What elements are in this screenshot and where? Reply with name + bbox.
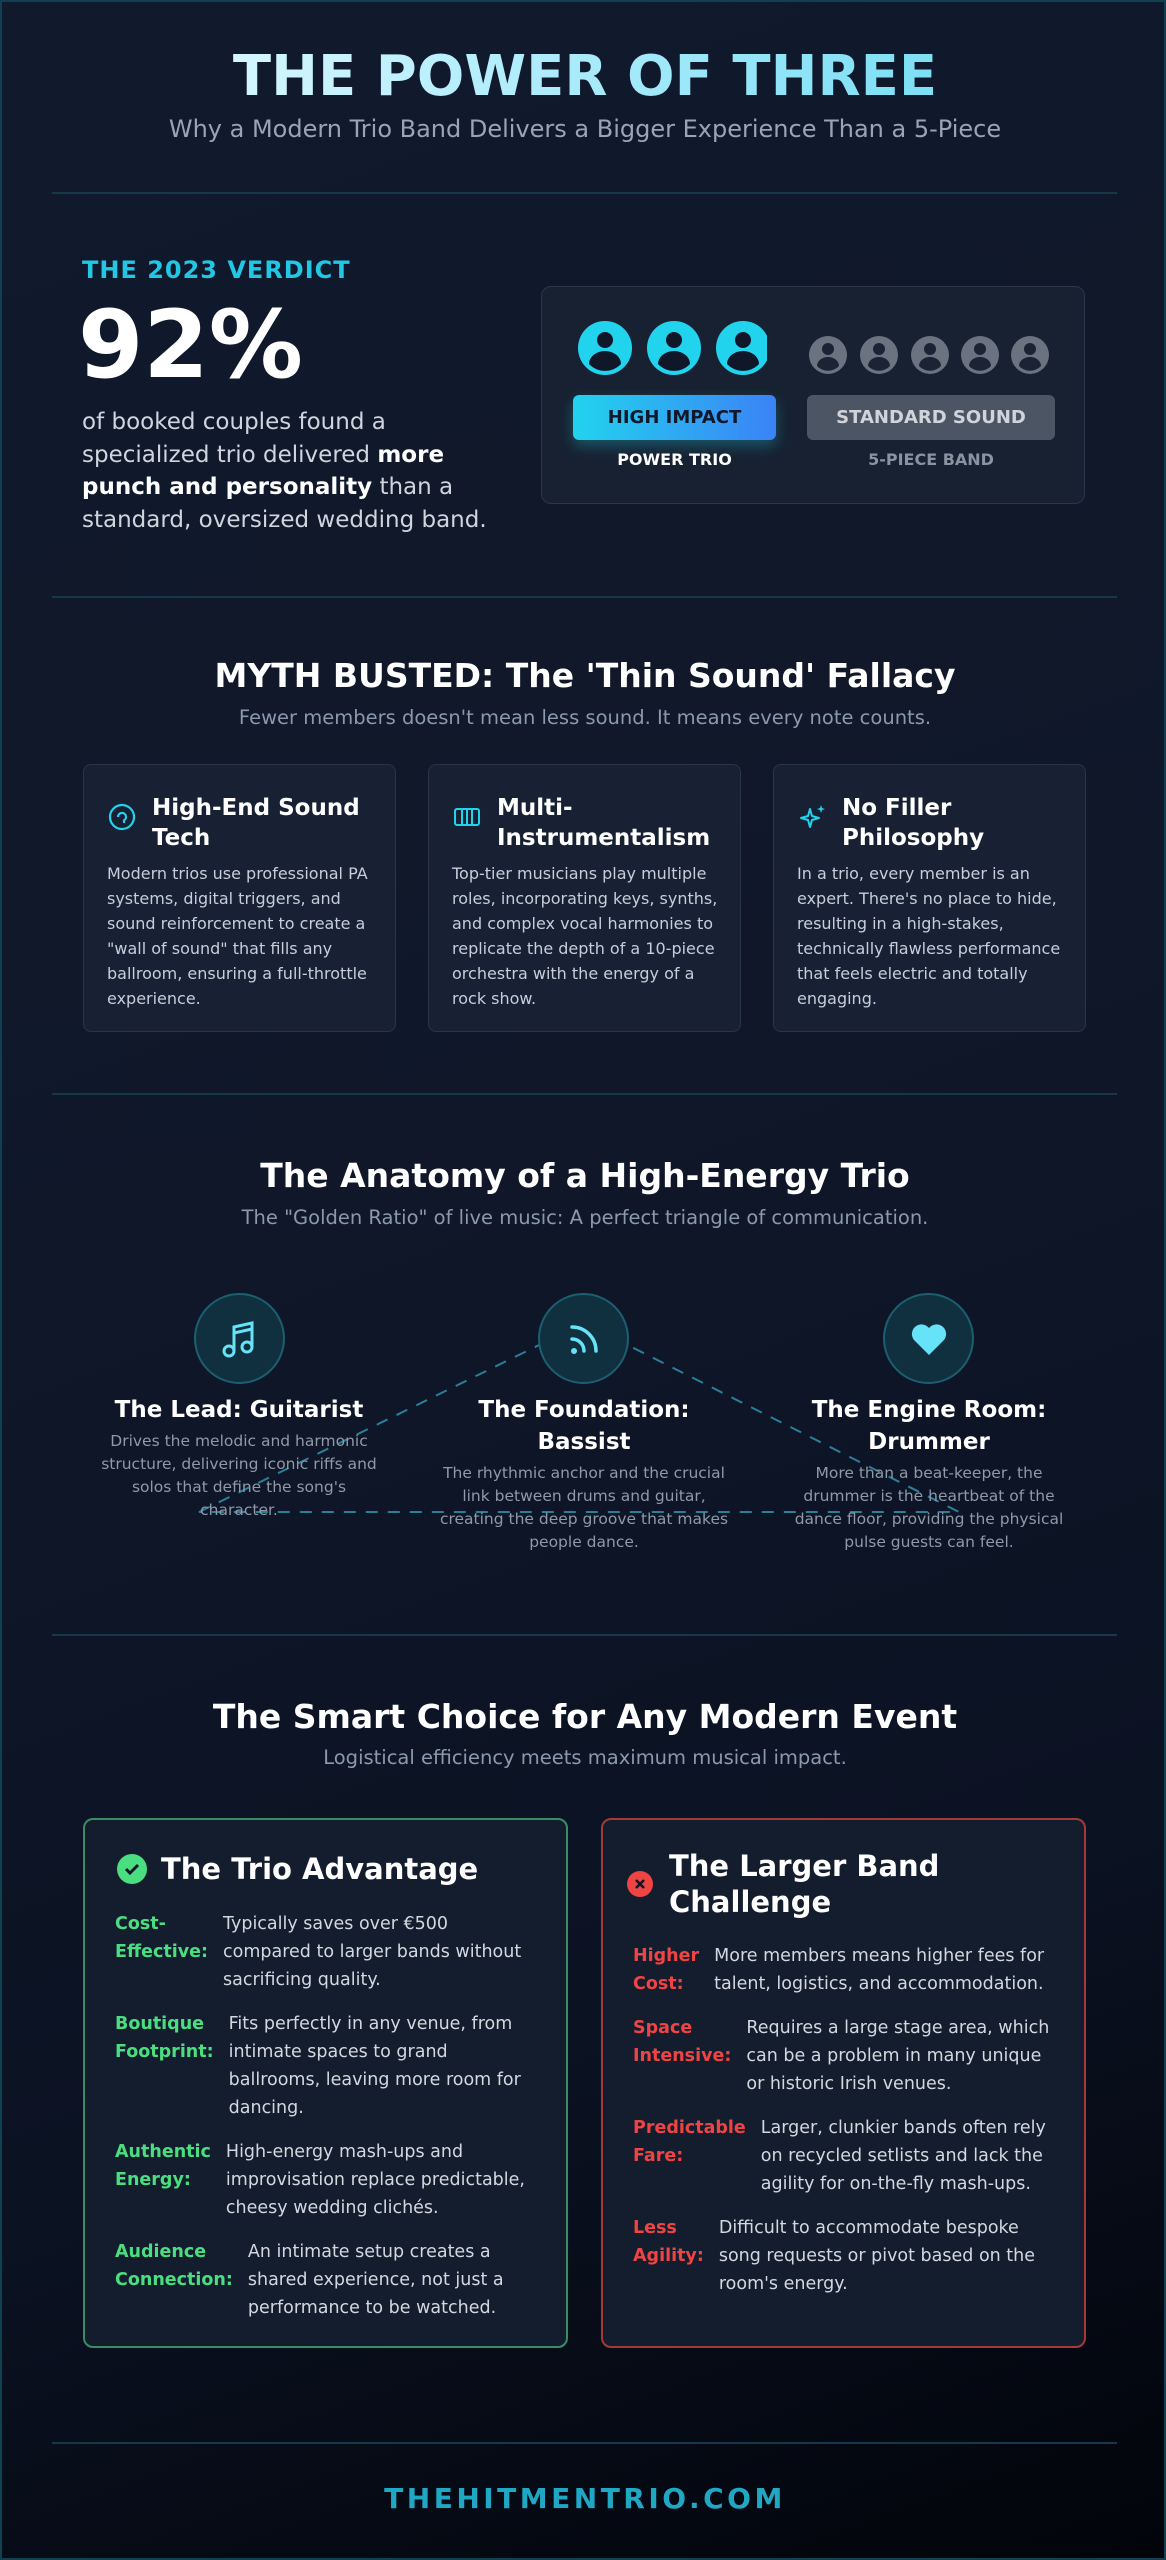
role: bassist: Bassist [538,1429,630,1455]
footer: website: THEHITMENTRIO.COM [384,2482,786,2515]
badge: standard sound: STANDARD SOUND [836,407,1026,428]
card: no filler philosophy: Philosophy [842,825,984,851]
panel: trio advantage: An intimate setup creates a shared experience, not just a performance to be watched. [248,2242,504,2318]
panel: larger band challenge: Cost: [633,1974,684,1994]
card: no filler philosophy: In a trio, every member is an expert. There's no place to hide, resulting in a high-stakes, technically flawless performance that feels electric and totally engaging. [797,864,1060,1008]
heading: anatomy: The Anatomy of a High-Energy Trio [260,1156,910,1195]
icon: keys [454,808,480,826]
panel: trio advantage: Effective: [115,1942,208,1962]
panel: trio advantage [83,1818,568,2348]
big stat 92%: 92% [78,291,303,400]
panel title [627,1849,939,1919]
icon: sound [108,804,136,830]
panel: larger band challenge [601,1818,1086,2348]
panel title: The Trio Advantage [161,1852,478,1886]
role: bassist [440,1397,728,1551]
subtitle: Why a Modern Trio Band Delivers a Bigger Experience Than a 5-Piece [169,115,1001,143]
heading: smart choice: The Smart Choice for Any Modern Event [213,1697,957,1736]
icon: sparkle [800,805,825,828]
icon: guitarist [194,1293,285,1384]
panel: larger band challenge: Agility: [633,2246,704,2266]
badge: standard sound [807,395,1055,440]
panel title: Challenge [669,1885,831,1919]
panel: trio advantage: Footprint: [115,2042,214,2062]
card: high-end sound tech [83,764,396,1032]
panel title: The Larger Band [669,1849,939,1883]
role: bassist: The Foundation: [478,1397,690,1423]
card: multi-instrumentalism [428,764,741,1032]
panel: trio advantage: Energy: [115,2170,191,2190]
panel: larger band challenge: Difficult to accommodate bespoke song requests or pivot based on the room's energy. [719,2218,1035,2294]
panel: larger band challenge: Requires a large stage area, which can be a problem in many unique or historic Irish venues. [746,2018,1049,2094]
panel: larger band challenge: Higher [633,1946,699,1966]
icons: 5-piece members [809,336,1049,374]
role: drummer [795,1397,1063,1551]
panel: larger band challenge: Intensive: [633,2046,731,2066]
verdict text: of booked couples found a specialized trio delivered more punch and personality than a standard, oversized wedding band. [82,409,487,532]
panel: trio advantage: Connection: [115,2270,233,2290]
subheading: Logistical efficiency meets maximum musical impact. [323,1746,847,1769]
card: no filler philosophy: No Filler [842,795,951,821]
label: 5-piece band: 5-PIECE BAND [868,450,994,469]
heading: myth busted: MYTH BUSTED: The 'Thin Sound' Fallacy [215,656,955,695]
panel: trio advantage: High-energy mash-ups and improvisation replace predictable, cheesy wedding clichés. [226,2142,525,2218]
panel: trio advantage: Cost- [115,1914,166,1934]
role: guitarist: Drives the melodic and harmonic structure, delivering iconic riffs and solos that define the song's character. [101,1432,377,1519]
badge: high impact: HIGH IMPACT [608,407,741,428]
panel: trio advantage: Authentic [115,2142,211,2162]
card: multi-instrumentalism: Instrumentalism [497,825,710,851]
diagram: dashed triangle [198,1344,959,1513]
panel: larger band challenge: Larger, clunkier bands often rely on recycled setlists and lack the agility for on-the-fly mash-ups. [761,2118,1046,2194]
role: drummer: More than a beat-keeper, the drummer is the heartbeat of the dance floor, providing the physical pulse guests can feel. [795,1464,1063,1551]
role: drummer: The Engine Room: [812,1397,1046,1423]
card: no filler philosophy [773,764,1086,1032]
subheading: Fewer members doesn't mean less sound. It means every note counts. [239,706,931,729]
verdict label: THE 2023 VERDICT [82,256,351,284]
panel: trio advantage: Audience [115,2242,206,2262]
panel: larger band challenge: Fare: [633,2146,683,2166]
role: bassist: The rhythmic anchor and the crucial link between drums and guitar, creating the deep groove that makes people dance. [440,1464,728,1551]
role: guitarist: The Lead: Guitarist [115,1397,363,1423]
card: high-end sound tech: Modern trios use professional PA systems, digital triggers, and sound reinforcement to create a "wall of sound" that fills any ballroom, ensuring a full-throttle experience. [107,864,368,1008]
panel: larger band challenge: Less [633,2218,677,2238]
title: THE POWER OF THREE [233,44,937,109]
panel: larger band challenge: Space [633,2018,692,2038]
label: power trio: POWER TRIO [617,450,732,469]
icon: bassist [538,1293,629,1384]
panel: trio advantage: Fits perfectly in any venue, from intimate spaces to grand ballrooms, leaving more room for dancing. [229,2014,521,2118]
panel: trio vs band comparison [541,286,1085,504]
panel: trio advantage: Typically saves over €500 compared to larger bands without sacrificing quality. [223,1914,521,1990]
card: high-end sound tech: Tech [152,825,210,851]
panel: trio advantage: Boutique [115,2014,204,2034]
role: drummer: Drummer [868,1429,990,1455]
card: multi-instrumentalism: Top-tier musicians play multiple roles, incorporating keys, synths, and complex vocal harmonies to replicate the depth of a 10-piece orchestra with the energy of a rock show. [452,864,717,1008]
icons: trio members [578,321,767,375]
card: high-end sound tech: High-End Sound [152,795,360,821]
card: multi-instrumentalism: Multi- [497,795,573,821]
subheading: The "Golden Ratio" of live music: A perfect triangle of communication. [242,1206,928,1229]
panel: larger band challenge: More members means higher fees for talent, logistics, and accommodation. [714,1946,1044,1994]
badge: high impact [573,395,776,440]
panel: larger band challenge: Predictable [633,2118,746,2138]
icon: drummer [883,1293,974,1384]
